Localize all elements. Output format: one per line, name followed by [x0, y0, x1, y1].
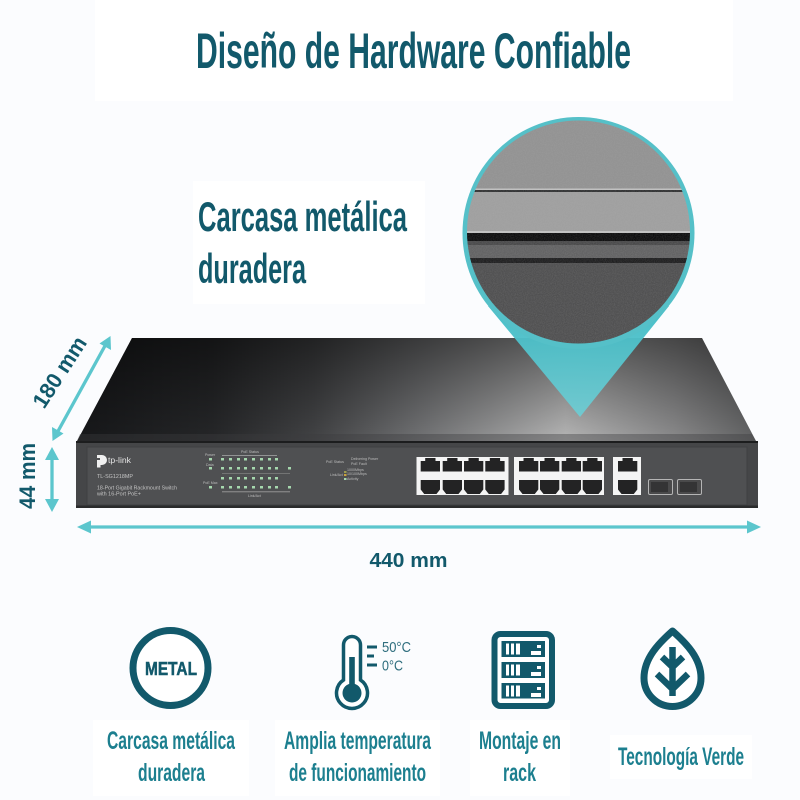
- port block 2: [514, 457, 604, 495]
- label panel: metal housing: duradera: [138, 759, 206, 787]
- port block 1: [416, 457, 508, 495]
- icon: metal badge: METAL: [145, 659, 197, 679]
- LED labels: Link/Act: [248, 494, 261, 498]
- heading panel: metal housing: [193, 181, 425, 304]
- label panel: green technology: [610, 735, 752, 779]
- label panel: rack mount: [470, 720, 570, 796]
- dimension arrow: height: [45, 447, 59, 512]
- icon: thermometer: 50°C: [382, 639, 411, 656]
- icon: metal badge: [133, 630, 208, 706]
- brand text: 18-Port Gigabit Rackmount Switch: [97, 486, 177, 492]
- title panel: [95, 0, 733, 101]
- label panel: metal housing: [93, 720, 249, 796]
- dimension arrow: width: [77, 520, 761, 534]
- switch front panel: [76, 443, 758, 508]
- heading: metal housing: duradera: [198, 245, 306, 292]
- logo mark: [97, 455, 107, 468]
- brand text: TL-SG1218MP: [97, 474, 133, 480]
- brand text: [96, 455, 177, 498]
- feature: green technology: [610, 631, 752, 779]
- status LEDs: [209, 455, 346, 492]
- LED labels: PoE Status: [241, 450, 259, 454]
- label panel: temperature: [275, 720, 440, 796]
- feature: metal housing: [93, 630, 249, 796]
- LED labels: Data: [206, 463, 214, 467]
- LED labels: 1000Mbps: [347, 468, 364, 472]
- icon: thermometer: 0°C: [382, 658, 403, 674]
- dimension arrow: depth: [52, 336, 111, 441]
- label: 440 mm: 440 mm: [370, 550, 448, 572]
- icon: server rack: [494, 634, 552, 706]
- label panel: rack mount: rack: [503, 759, 536, 787]
- LED labels: Power: [205, 453, 216, 457]
- switch top cover: [76, 338, 758, 444]
- brand text: with 16-Port PoE+: [96, 492, 141, 498]
- SFP slots: [648, 480, 702, 494]
- LED labels: 10/100Mbps: [347, 472, 367, 476]
- label panel: temperature: Amplia temperatura: [284, 727, 432, 755]
- heading: metal housing: Carcasa metálica: [198, 193, 407, 240]
- LED labels: Delivering Power: [351, 457, 379, 461]
- label panel: temperature: de funcionamiento: [289, 759, 426, 787]
- LED labels: PoE Max: [203, 481, 218, 485]
- magnifier ring: [462, 117, 694, 349]
- LED labels: PoE Status: [326, 460, 344, 464]
- icon: thermometer: [337, 636, 411, 708]
- brand text: tp-link: [108, 456, 132, 465]
- LED labels: [203, 450, 379, 498]
- label panel: rack mount: Montaje en: [479, 727, 561, 755]
- label: 180 mm: 180 mm: [27, 332, 92, 412]
- callout pointer: [488, 306, 669, 417]
- LED labels: Link/Act: [330, 473, 343, 477]
- label: 44 mm: 44 mm: [15, 443, 40, 509]
- LED labels: Activity: [347, 477, 359, 481]
- icon: leaf: [644, 631, 701, 706]
- metal close-up: [467, 120, 690, 344]
- port block 3: [613, 457, 641, 495]
- callout: magnifier with metal close-up: [460, 115, 700, 417]
- label panel: metal housing: Carcasa metálica: [107, 727, 236, 755]
- feature: temperature range: [275, 636, 440, 796]
- feature: rack mount: [470, 634, 570, 796]
- LED labels: PoE Fault: [351, 462, 367, 466]
